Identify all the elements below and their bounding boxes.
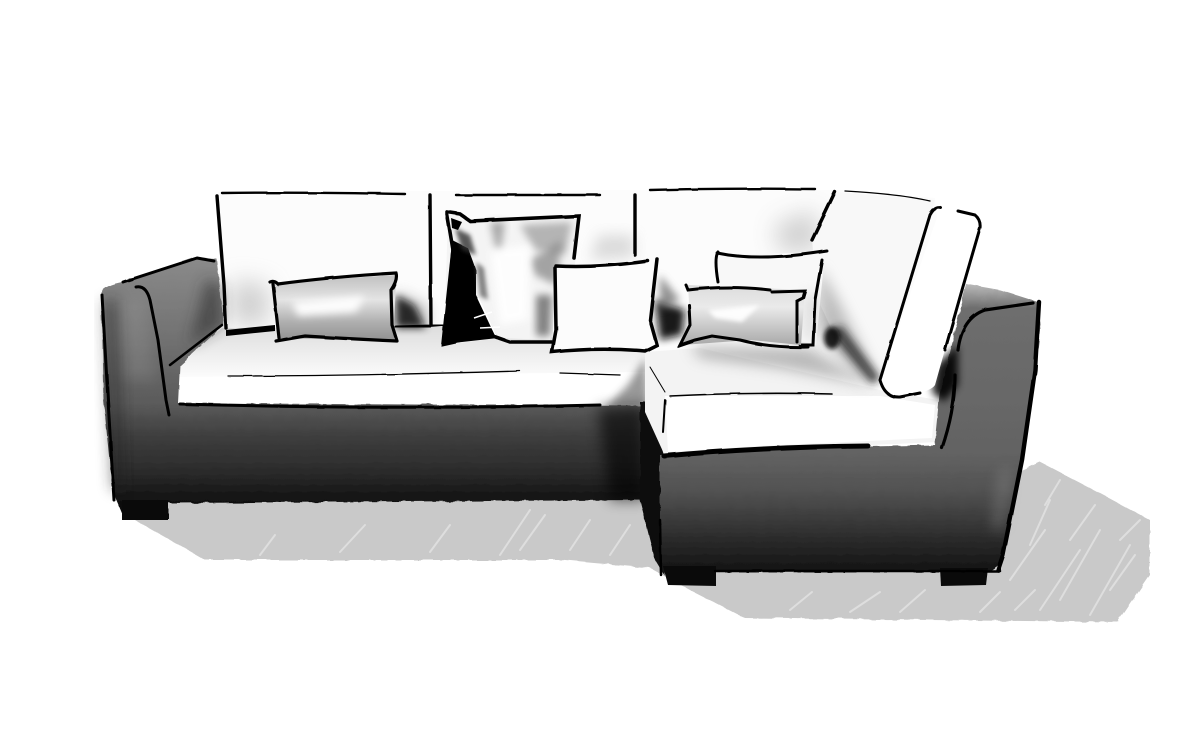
body: centre junction (640, 402, 665, 575)
pillow: white rear right (715, 251, 827, 345)
chaise back side cushion (812, 192, 935, 385)
outline: left seat (228, 371, 620, 376)
pillow: front right small (680, 285, 808, 347)
seat cushion: chaise (645, 346, 938, 456)
body: left section (101, 257, 645, 518)
outline: back top and dividers (222, 189, 815, 195)
armrest cushion (879, 208, 980, 397)
line work (102, 189, 1039, 575)
pillow: white centre (552, 259, 657, 352)
outline: chaise back (812, 192, 835, 240)
floor shadow (135, 462, 1150, 622)
shadow pockets between pillows (226, 275, 840, 349)
outline: left arm (102, 258, 214, 500)
pillow: palm leaf print (443, 212, 579, 345)
seat cushion: left (176, 326, 650, 408)
body: chaise (660, 284, 1040, 572)
outline: right arm (942, 303, 1033, 448)
back cushions (218, 190, 945, 390)
feet (122, 500, 988, 586)
outline: chaise bottom (660, 520, 1000, 575)
outline: chaise seat (670, 393, 832, 396)
line: seat and back junction (396, 325, 443, 327)
pillow: rectangular left (270, 273, 397, 341)
